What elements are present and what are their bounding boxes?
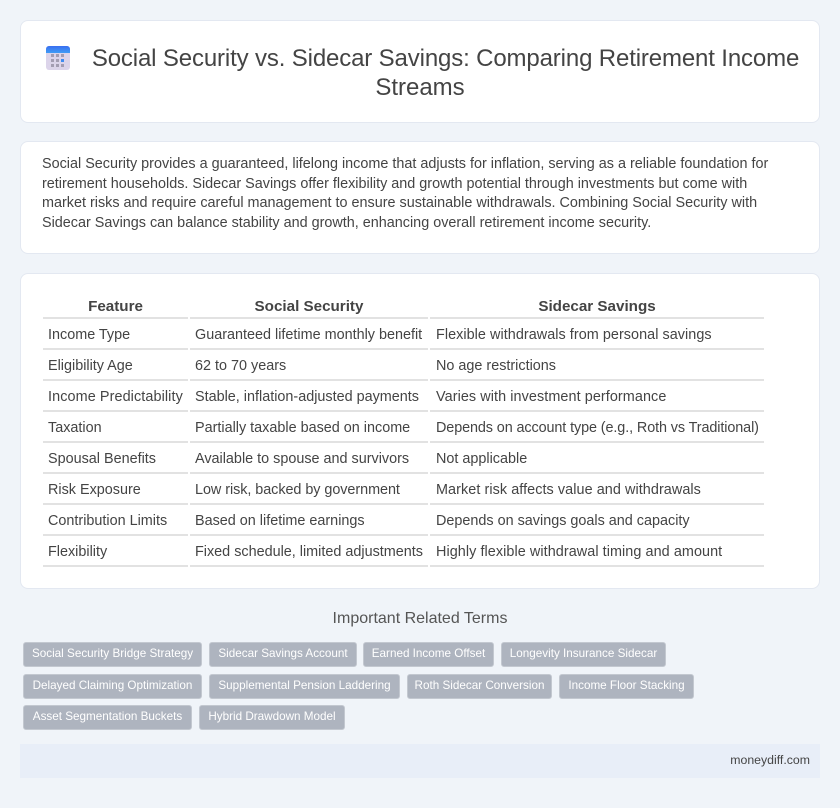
footer xyxy=(20,744,820,778)
comparison table: Stable, inflation-adjusted payments xyxy=(195,389,419,405)
comparison table: Flexibility xyxy=(48,544,107,560)
related term tags: Earned Income Offset xyxy=(372,647,485,660)
comparison table: 62 to 70 years xyxy=(195,358,286,374)
comparison table: Based on lifetime earnings xyxy=(195,513,365,529)
title: Streams xyxy=(375,74,465,101)
comparison table: Guaranteed lifetime monthly benefit xyxy=(195,327,422,343)
comparison table: Feature xyxy=(88,298,143,315)
comparison table: Spousal Benefits xyxy=(48,451,156,467)
comparison table: No age restrictions xyxy=(436,358,556,374)
comparison table: Taxation xyxy=(48,420,102,436)
comparison table: Income Predictability xyxy=(48,389,183,405)
summary text: Sidecar Savings can balance stability and growth, enhancing overall retirement income security. xyxy=(42,214,651,230)
title xyxy=(92,45,799,101)
related term tags: Income Floor Stacking xyxy=(568,679,685,692)
comparison table: Flexible withdrawals from personal savings xyxy=(436,327,712,343)
comparison table: Highly flexible withdrawal timing and amount xyxy=(436,544,722,560)
comparison table: Eligibility Age xyxy=(48,358,133,374)
heading: related terms: Important Related Terms xyxy=(333,610,507,627)
icon: calendar xyxy=(46,46,70,70)
summary text: retirement households. Sidecar Savings offer flexibility and growth potential through investments but come with xyxy=(42,176,747,192)
summary text xyxy=(42,156,768,230)
comparison table: Depends on account type (e.g., Roth vs Traditional) xyxy=(436,420,759,436)
comparison table: Risk Exposure xyxy=(48,482,141,498)
panel: header xyxy=(20,20,820,123)
footer source: moneydiff.com xyxy=(730,753,810,767)
comparison table: Available to spouse and survivors xyxy=(195,451,409,467)
title: Social Security vs. Sidecar Savings: Comparing Retirement Income xyxy=(92,45,799,72)
comparison table: Income Type xyxy=(48,327,130,343)
panel: comparison table xyxy=(20,273,820,589)
related term tags: Delayed Claiming Optimization xyxy=(33,679,192,692)
panel: summary paragraph xyxy=(20,141,820,254)
related term tags xyxy=(23,642,694,730)
comparison table: Contribution Limits xyxy=(48,513,167,529)
comparison table: Sidecar Savings xyxy=(538,298,656,315)
related term tags: Sidecar Savings Account xyxy=(218,647,348,660)
comparison table: Social Security xyxy=(255,298,363,315)
related term tags: Roth Sidecar Conversion xyxy=(415,679,544,692)
related term tags: Longevity Insurance Sidecar xyxy=(510,647,657,660)
summary text: market risks and require careful management to ensure sustainable withdrawals. Combining Social Security with xyxy=(42,195,757,211)
comparison table xyxy=(43,298,764,567)
comparison table: Market risk affects value and withdrawals xyxy=(436,482,701,498)
comparison table: Partially taxable based on income xyxy=(195,420,410,436)
related term tags: Social Security Bridge Strategy xyxy=(32,647,193,660)
related term tags: Asset Segmentation Buckets xyxy=(33,710,182,723)
summary text: Social Security provides a guaranteed, lifelong income that adjusts for inflation, serving as a reliable foundation for xyxy=(42,156,768,172)
comparison table: Fixed schedule, limited adjustments xyxy=(195,544,423,560)
related term tags: Supplemental Pension Laddering xyxy=(218,679,391,692)
related term tags: Hybrid Drawdown Model xyxy=(208,710,336,723)
comparison table: Low risk, backed by government xyxy=(195,482,400,498)
comparison table: Depends on savings goals and capacity xyxy=(436,513,690,529)
comparison table: Not applicable xyxy=(436,451,527,467)
comparison table: Varies with investment performance xyxy=(436,389,666,405)
